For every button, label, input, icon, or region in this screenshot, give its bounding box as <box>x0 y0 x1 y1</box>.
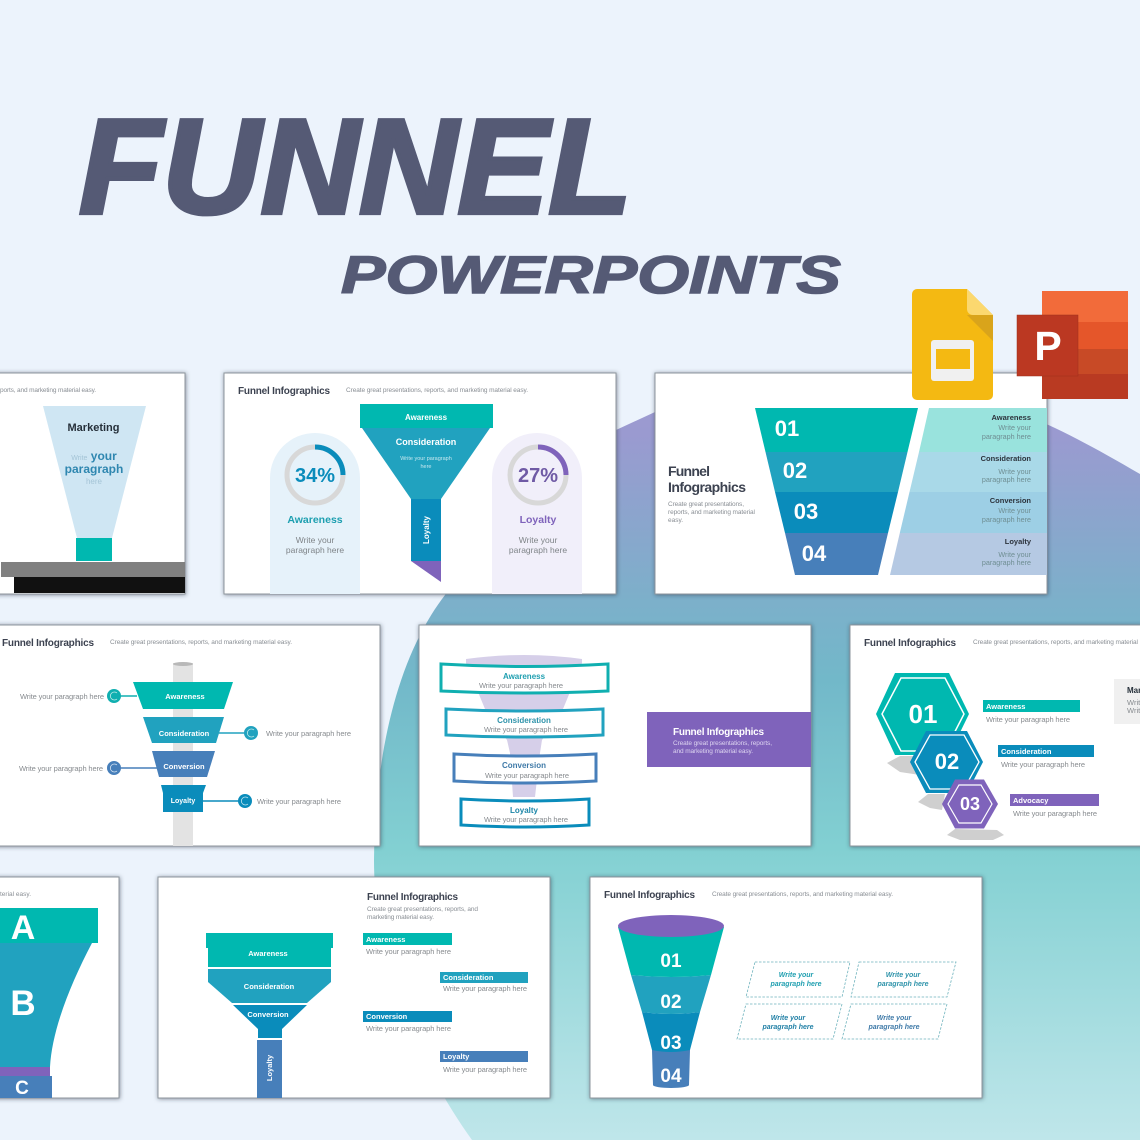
black bar <box>14 577 185 593</box>
dashed box 3: Write your <box>771 1015 807 1022</box>
slide description: easy. <box>668 517 683 524</box>
slide heading: Funnel Infographics <box>864 638 956 649</box>
slide description: Create great presentations, reports, and <box>367 906 478 913</box>
slide caption: Create great presentations, reports, and marketing material <box>973 639 1139 646</box>
box: conversion: Write your paragraph here <box>485 771 569 780</box>
slide heading: Funnel Infographics <box>604 890 695 901</box>
tier: awareness: Awareness <box>165 692 205 701</box>
loyalty label: Loyalty <box>520 514 557 526</box>
marketing heading: Marketing <box>68 422 119 434</box>
slide caption: Create great presentations, reports, and marketing material easy. <box>712 891 893 898</box>
tier: conversion <box>152 751 215 777</box>
paragraph text: here <box>86 477 103 486</box>
dashed box 2: paragraph here <box>877 981 929 988</box>
funnel middle: consideration: Consideration <box>396 437 456 447</box>
loyalty label: Write your <box>519 535 557 545</box>
label: consideration <box>440 972 528 993</box>
slide description: marketing material easy. <box>367 914 434 921</box>
label: loyalty: Write your paragraph here <box>443 1065 527 1074</box>
label: awareness: Write your paragraph here <box>986 715 1070 724</box>
cone band 03: 03 <box>660 1033 682 1054</box>
tier: awareness <box>133 682 233 709</box>
awareness label: Write your <box>296 535 334 545</box>
callout: awareness: Write your paragraph here <box>20 692 104 701</box>
label: awareness: Write your paragraph here <box>366 947 451 956</box>
funnel band 03 <box>775 492 898 533</box>
ring chart 34%: 34% <box>295 465 335 487</box>
awareness label: paragraph here <box>286 545 344 555</box>
band C <box>0 1076 52 1099</box>
callout: awareness <box>20 689 137 703</box>
callout: conversion: Write your paragraph here <box>19 764 103 773</box>
funnel band 03: 03 <box>794 499 818 524</box>
dashed box 1: Write your <box>779 972 815 979</box>
box: awareness <box>441 664 608 693</box>
subtitle: POWERPOINTS: POWERPOINTS <box>341 244 841 304</box>
purple title block: Create great presentations, reports, <box>673 740 772 747</box>
lilac funnel backdrop <box>466 655 582 797</box>
callout: consideration: Write your paragraph here <box>266 729 351 738</box>
purple title block: Funnel Infographics <box>673 727 764 738</box>
slide description: Create great presentations, <box>668 501 744 508</box>
label: consideration: Write your paragraph here <box>443 984 527 993</box>
side band: conversion <box>900 492 1047 533</box>
slide caption: Create great presentations, reports, and marketing material easy. <box>110 639 292 646</box>
funnel middle: consideration: Write your paragraph <box>400 456 452 462</box>
hexagon 03 <box>942 780 998 828</box>
side band: conversion: paragraph here <box>982 515 1031 524</box>
side band: loyalty: Loyalty <box>1005 537 1032 546</box>
band A: A <box>11 909 35 947</box>
slide heading: Funnel Infographics <box>2 638 94 649</box>
funnel band 01 <box>755 408 918 452</box>
slide caption: ports, and marketing material easy. <box>0 387 96 394</box>
side band: awareness: paragraph here <box>982 432 1031 441</box>
hexagon 03: 03 <box>960 794 980 814</box>
slide description: reports, and marketing material <box>668 509 756 516</box>
callout: loyalty: Write your paragraph here <box>257 797 341 806</box>
funnel: awareness <box>206 933 333 967</box>
hexagon 02: 02 <box>935 749 959 774</box>
funnel band 02 <box>766 452 908 492</box>
box: loyalty <box>461 799 589 827</box>
dashed box 2 <box>851 962 956 997</box>
paragraph text <box>65 449 123 486</box>
label: loyalty <box>440 1051 528 1074</box>
purple title block <box>647 712 811 767</box>
cone band 02: 02 <box>660 992 682 1013</box>
label: conversion: Write your paragraph here <box>366 1024 451 1033</box>
funnel: conversion: Conversion <box>247 1010 289 1019</box>
loyalty label <box>509 514 567 555</box>
box: awareness: Write your paragraph here <box>479 681 563 690</box>
box: loyalty: Write your paragraph here <box>484 815 568 824</box>
purple title block: and marketing material easy. <box>673 748 753 755</box>
funnel middle: consideration: here <box>420 464 432 470</box>
panel: stem funnel slide <box>158 877 550 1098</box>
awareness label: Awareness <box>287 514 343 526</box>
slide heading <box>668 463 746 495</box>
awareness label <box>286 514 344 555</box>
funnel: awareness: Awareness <box>248 949 288 958</box>
cone band 01: 01 <box>660 951 682 972</box>
tier: consideration <box>143 717 224 743</box>
title: FUNNEL: FUNNEL <box>79 91 632 242</box>
dashed box 1 <box>746 962 850 997</box>
funnel: consideration: Consideration <box>244 982 295 991</box>
paragraph text: Write your <box>71 449 117 463</box>
funnel band 04 <box>785 533 888 575</box>
funnel: loyalty stem <box>257 1040 282 1098</box>
funnel top: awareness: Awareness <box>405 413 448 422</box>
box: conversion <box>454 754 596 783</box>
label: awareness <box>363 933 452 956</box>
side band: awareness: Write your <box>998 423 1032 432</box>
hexagon 02 <box>910 731 983 793</box>
hexagon shadows <box>887 756 1004 840</box>
panel: numbered funnel slide <box>655 373 1047 594</box>
box: consideration: Consideration <box>497 716 551 725</box>
callout: conversion <box>19 761 157 775</box>
slide description <box>668 501 756 524</box>
funnel: loyalty stem: Loyalty <box>265 1054 274 1081</box>
slide heading: Infographics <box>668 479 746 495</box>
panel: percentage funnel slide <box>224 373 616 594</box>
purple divider band <box>0 1067 50 1076</box>
cone band 02 <box>631 975 711 1014</box>
side band: loyalty: paragraph here <box>982 558 1031 567</box>
dashed box 3: paragraph here <box>762 1024 814 1031</box>
label: consideration: Consideration <box>443 973 494 982</box>
label: loyalty: Loyalty <box>443 1052 470 1061</box>
label: consideration: Consideration <box>1001 747 1052 756</box>
side band: conversion: Conversion <box>990 496 1031 505</box>
funnel stem: loyalty: Loyalty <box>422 515 431 544</box>
side band: consideration <box>910 452 1047 492</box>
funnel: conversion <box>233 1005 307 1038</box>
slide heading: Funnel Infographics <box>238 386 330 397</box>
label: consideration <box>998 745 1094 769</box>
panel: conical funnel slide <box>590 877 982 1098</box>
cone band 04 <box>652 1050 690 1088</box>
icon: powerpoint <box>1017 291 1128 399</box>
side band: loyalty: Write your <box>998 550 1032 559</box>
funnel band 02: 02 <box>783 458 807 483</box>
slide heading: Funnel <box>668 463 710 479</box>
slide caption: Create great presentations, reports, and marketing material easy. <box>346 387 528 394</box>
hexagon 01: 01 <box>909 699 937 729</box>
label: awareness: Awareness <box>366 935 405 944</box>
band B <box>0 943 92 1067</box>
gray bar <box>1 562 185 577</box>
background gradient circle <box>374 373 1140 1140</box>
panel: hexagon slide <box>850 625 1140 846</box>
label: conversion: Conversion <box>366 1012 408 1021</box>
panel: ABC funnel slide <box>0 877 119 1099</box>
icon: google slides <box>912 289 993 400</box>
cone band 03 <box>642 1012 700 1054</box>
paragraph text: paragraph <box>65 462 123 476</box>
label: consideration: Write your paragraph here <box>1001 760 1085 769</box>
dashed box 4: Write your <box>877 1015 913 1022</box>
band C: C <box>15 1078 29 1099</box>
side band: conversion: Write your <box>998 506 1032 515</box>
tier: loyalty <box>161 785 206 812</box>
label: advocacy: Advocacy <box>1013 796 1049 805</box>
box: conversion: Conversion <box>502 761 546 770</box>
funnel middle: consideration <box>362 428 490 499</box>
side band: consideration: paragraph here <box>982 475 1031 484</box>
ring chart 27% <box>510 447 566 503</box>
side band: awareness <box>919 408 1047 452</box>
funnel stem: loyalty <box>411 499 441 561</box>
loyalty label: paragraph here <box>509 545 567 555</box>
callout: consideration <box>219 726 351 740</box>
left arch <box>270 433 360 594</box>
panel: outlined boxes funnel slide <box>419 625 811 846</box>
dashed box 3 <box>737 1004 842 1039</box>
vertical pole <box>173 662 193 846</box>
cone opening ellipse <box>618 915 724 937</box>
label: conversion <box>363 1011 452 1033</box>
band A <box>0 908 98 947</box>
purple stem tip <box>411 561 441 582</box>
ring chart 27%: 27% <box>518 465 558 487</box>
funnel: consideration <box>208 969 331 1003</box>
funnel top: awareness <box>360 404 493 428</box>
panel: marketing funnel slide <box>0 373 185 594</box>
light funnel shape <box>43 406 146 538</box>
label: advocacy: Write your paragraph here <box>1013 809 1097 818</box>
dashed box 1: paragraph here <box>770 981 822 988</box>
dashed box 4 <box>842 1004 947 1039</box>
callout: loyalty <box>203 794 341 808</box>
funnel band 04: 04 <box>802 541 827 566</box>
tier: conversion: Conversion <box>163 762 205 771</box>
side band: awareness: Awareness <box>992 413 1031 422</box>
label: awareness <box>983 700 1080 724</box>
cone band 04: 04 <box>660 1066 682 1087</box>
cone band 01 <box>618 927 724 977</box>
label: awareness: Awareness <box>986 702 1025 711</box>
band B: B <box>10 984 36 1023</box>
right arch <box>492 433 582 594</box>
slide description <box>367 906 478 921</box>
box: consideration <box>446 709 603 737</box>
slide caption: terial easy. <box>0 891 31 898</box>
panel: pole funnel slide <box>0 625 380 846</box>
box: awareness: Awareness <box>503 672 546 681</box>
funnel band 01: 01 <box>775 416 799 441</box>
dashed box 2: Write your <box>886 972 922 979</box>
ring chart 34% <box>287 447 343 503</box>
box: consideration: Write your paragraph here <box>484 725 568 734</box>
box: loyalty: Loyalty <box>510 806 539 815</box>
side band: consideration: Write your <box>998 467 1032 476</box>
tier: loyalty: Loyalty <box>171 798 195 805</box>
tier: consideration: Consideration <box>159 729 210 738</box>
gray side card <box>1114 679 1140 724</box>
label: advocacy <box>1010 794 1099 818</box>
slide heading: Funnel Infographics <box>367 892 458 903</box>
funnel base block <box>76 538 112 561</box>
icon: powerpoint: P <box>1034 323 1062 369</box>
side band: loyalty <box>890 533 1047 575</box>
side band: consideration: Consideration <box>981 454 1031 463</box>
hexagon 01 <box>876 673 969 755</box>
dashed box 4: paragraph here <box>868 1024 920 1031</box>
